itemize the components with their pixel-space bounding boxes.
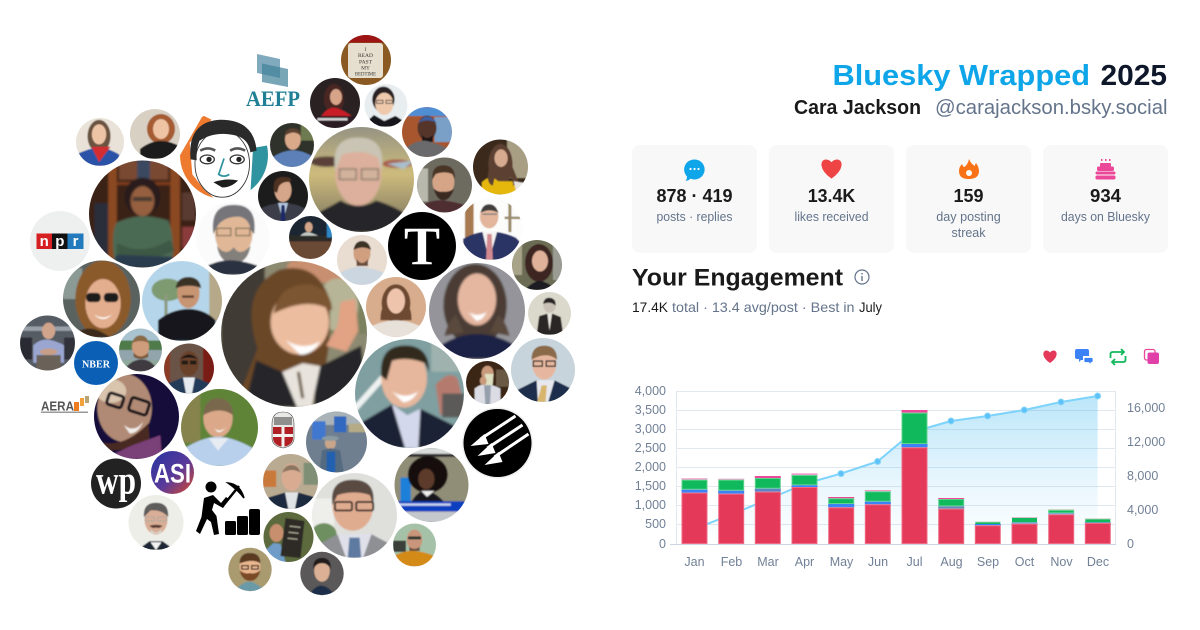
- x axis labels: Nov: [1050, 555, 1073, 569]
- right axis labels: [1127, 401, 1165, 551]
- x axis labels: May: [830, 555, 854, 569]
- stat label: likes received: [794, 210, 869, 224]
- cumulative points: [838, 393, 1101, 477]
- icon: likes: [1043, 350, 1057, 363]
- avatar: ASI logo: [151, 451, 194, 494]
- left axis labels: 1,500: [635, 479, 666, 493]
- avatar: person with blue protest signs: [306, 412, 367, 472]
- panel: stat card posting streak: [906, 145, 1031, 253]
- icon: replies: [1075, 349, 1093, 364]
- avatar: man with grey hair and mustache: [128, 495, 184, 550]
- icon: birthday cake: [1096, 159, 1116, 180]
- avatar: woman in superhero top: [76, 118, 124, 166]
- left axis labels: 500: [645, 517, 666, 531]
- avatar: smiling man outdoors: [119, 328, 162, 372]
- avatar: cartoon face: [180, 116, 268, 198]
- avatar: man with dark hair on grey background: [300, 552, 344, 596]
- avatar: ASI logo: ASI: [154, 458, 191, 488]
- avatar: pillow with text: [341, 35, 391, 85]
- stat value: 878 · 419: [656, 185, 732, 206]
- right axis labels: 8,000: [1127, 469, 1158, 483]
- avatar: black circle with three white arrows: [462, 408, 533, 478]
- icon: reposts: [1110, 349, 1126, 365]
- x axis labels: Jun: [868, 555, 888, 569]
- avatar: man under palm tree: [142, 261, 222, 341]
- stat label: days on Bluesky: [1061, 210, 1151, 224]
- avatar: man in dark suit: [258, 171, 308, 221]
- stat label: second line: streak: [952, 226, 986, 240]
- avatar: Washington Post logo: wp: [96, 458, 136, 502]
- logo: Brown University crest: [272, 412, 294, 448]
- avatar: woman in yellow: [473, 140, 528, 194]
- avatar: pillow with text: READ: [358, 53, 373, 59]
- cumulative line: [694, 396, 1098, 529]
- bars: reposts: [682, 413, 1110, 524]
- x axis labels: Feb: [721, 555, 742, 569]
- engagement summary: 17.4K: [632, 299, 669, 315]
- avatar: woman smiling on grey background: [429, 263, 525, 359]
- right axis labels: 16,000: [1127, 401, 1165, 415]
- chart: monthly engagement stacked bars with cumulative line: [635, 384, 1165, 569]
- avatar: cartoon man with beard: [226, 546, 274, 593]
- avatar: man with silver hair and glasses: [309, 127, 414, 232]
- stat value: 159: [954, 185, 984, 206]
- left axis labels: [635, 384, 666, 551]
- x axis labels: Dec: [1087, 555, 1109, 569]
- left axis labels: 4,000: [635, 384, 666, 398]
- avatar: NPR logo: r: [73, 233, 79, 250]
- cumulative area: [694, 396, 1098, 544]
- avatar: pillow with text: MY: [361, 66, 370, 72]
- avatar: balding man with navy jacket: [263, 454, 318, 509]
- left axis labels: 1,000: [635, 498, 666, 512]
- panel: stat card days on Bluesky: [1043, 145, 1168, 253]
- heading: Your Engagement: Your Engagement: [632, 264, 843, 292]
- logo: AERA: [41, 396, 89, 414]
- stat value: 934: [1090, 185, 1122, 206]
- stat label: first line: day posting: [936, 210, 1001, 224]
- x axis labels: [684, 555, 1109, 569]
- x axis labels: Oct: [1015, 555, 1035, 569]
- avatar: smiling man in navy blazer: [355, 339, 464, 448]
- icon: flame: [959, 159, 979, 179]
- avatar: woman with glasses and dark hair: [364, 84, 408, 127]
- left axis labels: 3,500: [635, 403, 666, 417]
- avatar: NPR logo: p: [55, 233, 64, 250]
- stat label: posts · replies: [656, 210, 732, 224]
- avatar: New York Times logo: [388, 212, 456, 280]
- right axis labels: 12,000: [1127, 435, 1165, 449]
- avatar: woman with tan background: [366, 277, 426, 337]
- avatar: black and white portrait: [528, 292, 571, 335]
- avatar: pillow with text: BEDTIME: [355, 72, 376, 78]
- avatar: person drinking from cup: [466, 361, 509, 404]
- avatar: man with blonde hair and gold tie: [511, 338, 575, 402]
- avatar: woman on TV in red: [310, 78, 360, 128]
- avatar: man with hood: [402, 107, 452, 157]
- stat value: 13.4K: [808, 185, 856, 206]
- avatar: man with blue shirt at airport: [20, 316, 75, 370]
- logo: AEFP: AEFP: [246, 86, 300, 111]
- left axis labels: 0: [659, 537, 666, 551]
- avatar: NPR logo: n: [40, 233, 49, 250]
- avatar: woman wearing sunglasses: [63, 260, 140, 338]
- avatar: bearded man: [417, 158, 472, 212]
- title: year: 2025: [1100, 60, 1167, 92]
- user name: Cara Jackson: [794, 97, 921, 119]
- avatar: man with light shirt: [337, 235, 387, 285]
- avatar: pillow with text: I: [365, 48, 367, 53]
- user handle: @carajackson.bsky.social: [935, 97, 1168, 119]
- bars: quotes: [682, 410, 1111, 522]
- x axis labels: Jul: [907, 555, 922, 569]
- avatar: NPR logo: [30, 211, 90, 271]
- x axis labels: Jan: [684, 555, 705, 569]
- icon: info: [855, 270, 869, 284]
- panel: stat card likes: [769, 145, 894, 253]
- right axis labels: 0: [1127, 537, 1134, 551]
- icon: miner with pickaxe and bars: [196, 482, 260, 535]
- chart grid: [670, 391, 1116, 544]
- left axis labels: 2,000: [635, 460, 666, 474]
- x axis labels: Aug: [940, 555, 963, 569]
- avatar: man in blue shirt: [270, 123, 314, 167]
- avatar: woman in front of bookshelf: [89, 160, 196, 268]
- avatar: man with glasses and grey suit: [312, 473, 397, 558]
- avatar: woman with dark wavy hair: [512, 240, 562, 290]
- title: Bluesky Wrapped: Bluesky Wrapped: [832, 60, 1090, 92]
- avatar: man with grey hair and glasses: [208, 204, 258, 275]
- avatar: pillow with text: PAST: [359, 60, 373, 66]
- avatar: man in light blue polo with greenery: [181, 389, 258, 466]
- panel: title header: [794, 60, 1168, 119]
- logo: AERA: AERA: [41, 400, 74, 414]
- avatar: bald man in orange shirt: [393, 524, 436, 566]
- bars: likes: [682, 448, 1110, 544]
- avatar: small man at a desk: [289, 216, 332, 259]
- x axis labels: Apr: [795, 555, 814, 569]
- avatar: man holding a menu: [261, 510, 316, 564]
- avatar: New York Times logo: T: [404, 216, 440, 276]
- left axis labels: 3,000: [635, 422, 666, 436]
- logo: AEFP: [246, 54, 300, 111]
- avatar: man with glasses in navy suit: [164, 344, 214, 394]
- avatar: large photo of smiling woman in blazer: [221, 261, 367, 407]
- icon: quotes: [1144, 350, 1159, 364]
- panel: stat card posts and replies: [632, 145, 757, 253]
- avatar: woman with curly hair on TV: [394, 448, 468, 522]
- left axis labels: 2,500: [635, 441, 666, 455]
- bars: replies: [682, 444, 1111, 525]
- avatar: purple-toned man with glasses: [94, 374, 179, 459]
- icon: chat bubble: [684, 159, 705, 181]
- x axis labels: Sep: [977, 555, 999, 569]
- x axis labels: Mar: [757, 555, 779, 569]
- avatar: woman with red hair: [130, 109, 180, 159]
- engagement summary: July: [859, 299, 882, 315]
- avatar: NBER logo: [74, 341, 118, 385]
- panel: avatar bubble cloud: [17, 32, 578, 597]
- icon: heart: [822, 160, 841, 178]
- chart legend icons: [1043, 349, 1159, 365]
- avatar: NBER logo: NBER: [82, 358, 111, 370]
- avatar: man in suit with cross: [462, 203, 520, 260]
- right axis labels: 4,000: [1127, 503, 1158, 517]
- engagement summary: total · 13.4 avg/post · Best in: [672, 299, 854, 315]
